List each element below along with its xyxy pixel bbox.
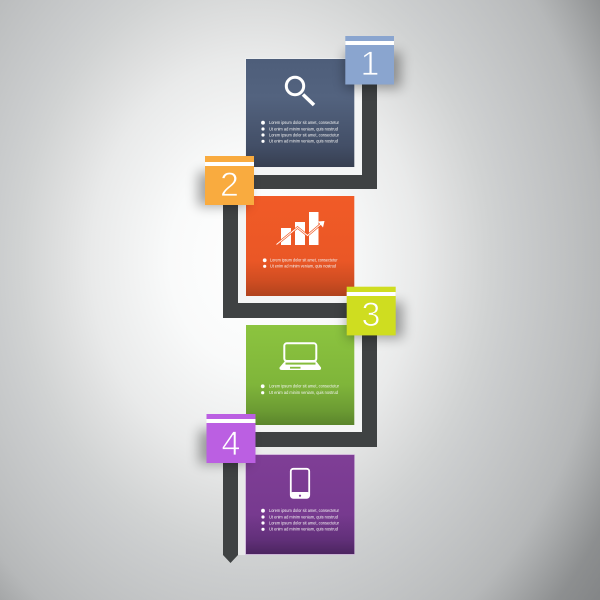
- bullet list: Lorem ipsum dolor sit amet, consectetur: [269, 120, 340, 125]
- bullet list: Ut enim ad minim veniam, quis nostrud: [269, 126, 339, 131]
- bullet list: [261, 508, 340, 532]
- connector path 1 to 2: [250, 84, 377, 189]
- connector arrow tail: [223, 460, 246, 563]
- panel 2: chart: [246, 196, 354, 296]
- bullet list: Lorem ipsum dolor sit amet, consectetur: [270, 258, 338, 263]
- connector path 2 to 3: [223, 200, 350, 318]
- bullet list: Ut enim ad minim veniam, quis nostrud: [269, 390, 339, 395]
- number tag 2: 2: [220, 166, 239, 204]
- icon: laptop: [279, 343, 321, 370]
- bullet list: Lorem ipsum dolor sit amet, consectetur: [269, 384, 340, 389]
- bullet list: Ut enim ad minim veniam, quis nostrud: [269, 514, 339, 519]
- panel 3: laptop: [246, 325, 354, 425]
- number tag 1: 1: [361, 45, 379, 83]
- bullet list: Lorem ipsum dolor sit amet, consectetur: [269, 508, 340, 513]
- number tag 4: 4: [222, 425, 240, 463]
- number tag 4: [199, 414, 256, 464]
- number tag 3: [347, 287, 403, 338]
- bullet list: Lorem ipsum dolor sit amet, consectetur: [269, 132, 340, 137]
- bullet list: Ut enim ad minim veniam, quis nostrud: [269, 139, 339, 144]
- bullet list: [263, 258, 338, 269]
- panel 4: phone: [245, 454, 355, 555]
- bullet list: Ut enim ad minim veniam, quis nostrud: [270, 264, 337, 269]
- number tag 3: 3: [362, 296, 380, 334]
- icon: bar chart with arrow: [276, 212, 324, 245]
- icon: smartphone: [291, 469, 309, 498]
- panel 1: search: [245, 58, 354, 168]
- connector path 3 to 4: [250, 330, 377, 447]
- icon: magnifier: [286, 77, 314, 105]
- bullet list: [261, 120, 340, 144]
- number tag 1: [345, 36, 401, 88]
- bullet list: [261, 384, 340, 395]
- bullet list: Ut enim ad minim veniam, quis nostrud: [269, 527, 339, 532]
- bullet list: Lorem ipsum dolor sit amet, consectetur: [269, 520, 340, 525]
- number tag 2: [198, 156, 254, 206]
